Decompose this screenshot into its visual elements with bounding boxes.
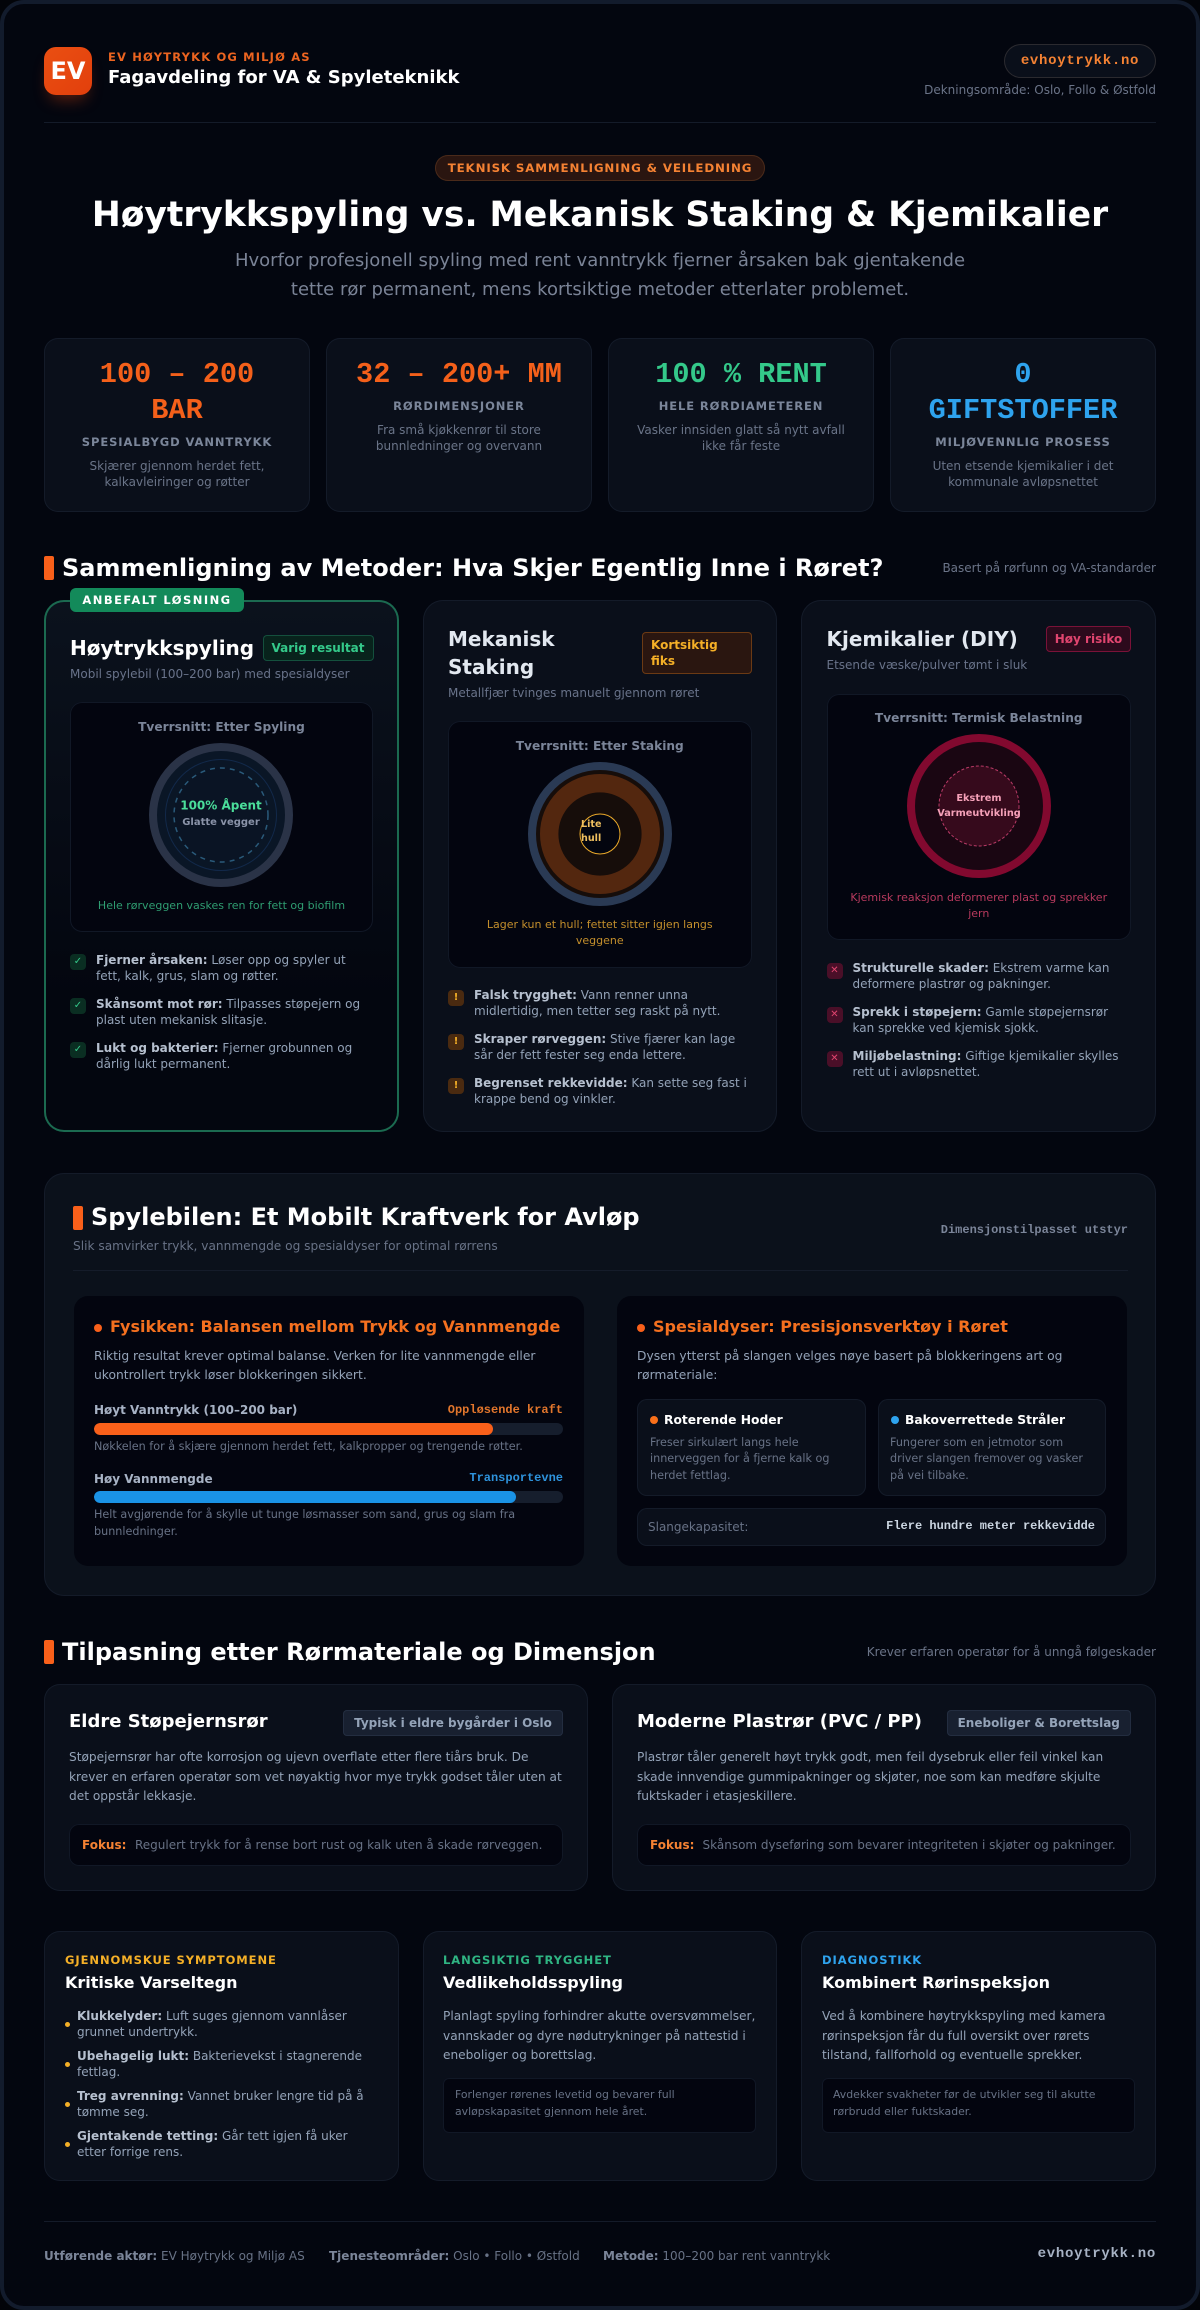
method title: Staking	[448, 655, 534, 679]
diagram panel	[70, 702, 373, 932]
icon: check	[70, 998, 86, 1014]
title: Bakoverrettede Stråler	[905, 1413, 1065, 1427]
benefit 2	[96, 996, 360, 1027]
bar note: volume	[94, 1508, 515, 1538]
title: Roterende Hoder	[664, 1413, 783, 1427]
kicker: GJENNOMSKUE SYMPTOMENE	[65, 1953, 277, 1967]
hazard 3: Miljøbelastning: Giftige kjemikalier skylles	[852, 1048, 1119, 1062]
website: evhoytrykk.no	[1038, 2246, 1156, 2262]
panel: Spylebilen	[44, 1173, 1156, 1596]
intro text	[637, 1348, 1062, 1382]
note box: Avdekker svakheter før de utvikler seg til akutte	[833, 2088, 1095, 2101]
description: herdet fettlag.	[650, 1468, 731, 1482]
diagram caption	[487, 918, 713, 947]
hazard 2	[852, 1004, 1108, 1034]
icon: cross	[826, 962, 842, 978]
stat: 100% rent: 100 % RENT	[655, 358, 827, 390]
benefit 2: Skånsomt mot rør: Tilpasses støpejern og	[96, 997, 360, 1011]
body text: Ved å kombinere høytrykkspyling med kamera	[822, 2009, 1106, 2023]
panel: inspection	[801, 1931, 1156, 2181]
title: Vedlikeholdsspyling	[443, 1973, 623, 1992]
bar note: pressure: Nøkkelen for å skjære gjennom herdet fett, kalkpropper og trengende røtter.	[94, 1440, 523, 1452]
body text: eneboliger og borettslag.	[443, 2048, 596, 2062]
benefit 3: dårlig lukt permanent.	[96, 1057, 230, 1071]
operator note: Krever erfaren operatør for å unngå følgeskader	[867, 1645, 1156, 1659]
hazard 2: Sprekk i støpejern: Gamle støpejernsrør	[852, 1004, 1108, 1018]
subheading: Slik samvirker trykk, vannmengde og spesialdyser for optimal rørrens	[73, 1239, 498, 1253]
icon: check: ✓	[74, 1000, 82, 1011]
method title: Kjemikalier (DIY)	[826, 627, 1018, 651]
sign 1: grunnet undertrykk.	[77, 2025, 198, 2039]
note box: Forlenger rørenes levetid og bevarer full	[455, 2088, 675, 2101]
description: Fungerer som en jetmotor som	[890, 1436, 1063, 1448]
short-term tag	[642, 632, 752, 674]
stat: 32-200 mm	[326, 338, 592, 512]
department name: Fagavdeling for VA & Spyleteknikk	[108, 67, 459, 88]
note box	[822, 2078, 1135, 2133]
sign 2: fettlag.	[77, 2065, 120, 2079]
drawback 2	[474, 1032, 735, 1062]
panel: cast iron	[44, 1684, 588, 1891]
sign 3: tømme seg.	[77, 2105, 149, 2119]
stat: 100-200 bar: kalkavleiringer og røtter	[104, 475, 250, 489]
kicker: DIAGNOSTIKK	[822, 1953, 922, 1967]
stat: 100-200 bar: BAR	[151, 394, 203, 426]
dot	[637, 1324, 645, 1332]
benefit 2: plast uten mekanisk slitasje.	[96, 1013, 267, 1027]
nozzle card: backward jets	[878, 1399, 1106, 1496]
icon: cross: ✕	[830, 1052, 839, 1064]
icon: warning: !	[454, 1080, 458, 1091]
hero	[92, 155, 1108, 235]
diagram caption: veggene	[576, 934, 624, 947]
method title: Høytrykkspyling	[70, 636, 254, 660]
diagram caption	[850, 890, 1108, 920]
coverage area: Dekningsområde: Oslo, Follo & Østfold	[924, 83, 1156, 97]
icon: warning: !	[454, 1036, 458, 1047]
icon: EV logo	[44, 47, 92, 95]
panel: plastic	[612, 1684, 1156, 1891]
website pill	[1004, 44, 1156, 78]
drawback 3: krappe bend og vinkler.	[474, 1092, 616, 1106]
drawback 1	[474, 988, 720, 1018]
stat: 0 giftstoffer: 0	[1014, 358, 1032, 390]
risk tag	[1046, 626, 1131, 652]
description	[650, 1436, 829, 1482]
header	[40, 44, 1156, 108]
body text: Planlagt spyling forhindrer akutte oversvømmelser,	[443, 2009, 755, 2023]
sign 3: Treg avrenning: Vannet bruker lengre tid på å	[77, 2089, 364, 2103]
tag	[946, 1710, 1131, 1736]
body text	[443, 2009, 755, 2062]
recommended badge	[70, 588, 244, 612]
hazard 1: Strukturelle skader: Ekstrem varme kan	[852, 960, 1110, 974]
chart: pipe cross-section, clean: 100% Åpent	[180, 798, 262, 812]
focus note	[69, 1824, 563, 1866]
chart: pipe cross-section, heat damage: Varmeutvikling	[937, 808, 1021, 819]
body text: vannskader og dyre nødutrykninger på nattestid i	[443, 2029, 746, 2043]
intro text: rørmateriale:	[637, 1368, 717, 1382]
body text: Plastrør tåler generelt høyt trykk godt, men feil dysebruk eller feil vinkel kan	[637, 1750, 1103, 1764]
bullet	[65, 2062, 70, 2066]
note box: avløpskapasitet gjennom hele året.	[455, 2105, 647, 2118]
diagram caption: Kjemisk reaksjon deformerer plast og sprekker	[850, 890, 1107, 904]
panel: maintenance	[423, 1931, 777, 2181]
icon: cross: ✕	[830, 964, 839, 976]
panel: Mekanisk Staking	[423, 600, 777, 1132]
list: hazards	[827, 960, 1119, 1078]
kicker: LANGSIKTIG TRYGGHET	[443, 1953, 612, 1967]
dot	[650, 1416, 658, 1424]
panel: Kjemikalier	[801, 600, 1156, 1132]
operator: Utførende aktør: EV Høytrykk og Miljø AS	[44, 2249, 305, 2263]
method: Metode: 100–200 bar rent vanntrykk	[603, 2249, 830, 2263]
icon: cross: ✕	[830, 1008, 839, 1020]
body text: tilstand, fallforhold og eventuelle sprekker.	[822, 2048, 1082, 2062]
bullet	[65, 2102, 70, 2106]
diagram title: Tverrsnitt: Etter Spyling	[138, 720, 305, 734]
method description: Etsende væske/pulver tømt i sluk	[826, 658, 1027, 672]
hazard 3	[852, 1048, 1119, 1078]
benefit 3	[96, 1041, 352, 1071]
nozzle card: rotating	[637, 1399, 866, 1496]
bar tag: pressure: Oppløsende kraft	[448, 1403, 563, 1417]
value: Flere hundre meter rekkevidde	[886, 1519, 1095, 1533]
chart: pipe cross-section, rodded	[528, 762, 672, 906]
icon: check	[70, 1042, 86, 1058]
icon: warning	[448, 1078, 464, 1094]
stat: 0 giftstoffer	[890, 338, 1156, 512]
panel heading: Fysikken: Balansen mellom Trykk og Vannmengde	[110, 1317, 560, 1336]
method description: Mobil spylebil (100–200 bar) med spesialdyser	[70, 667, 350, 681]
panel heading: Spesialdyser: Presisjonsverktøy i Røret	[653, 1317, 1008, 1336]
sign 3	[77, 2088, 364, 2119]
body text: skade innvendige gummipakninger og skjøter, noe som kan medføre skjulte	[637, 1770, 1100, 1784]
stat: 32-200 mm: 32 – 200+ MM	[356, 358, 562, 390]
recommended badge: ANBEFALT LØSNING	[82, 593, 232, 607]
intro text: ukontrollert trykk løser blokkeringen sikkert.	[94, 1368, 367, 1382]
method description: Metallfjær tvinges manuelt gjennom røret	[448, 686, 699, 700]
short-term tag: fiks	[651, 654, 675, 668]
list: drawbacks	[448, 988, 747, 1106]
stat: 100% rent: ikke får feste	[702, 439, 780, 453]
stat: 32-200 mm: bunnledninger og overvann	[376, 439, 542, 453]
diagram caption: jern	[968, 906, 989, 920]
stat: 0 giftstoffer: GIFTSTOFFER	[929, 394, 1117, 426]
sign 2	[77, 2049, 362, 2079]
description: driver slangen fremover og vasker	[890, 1452, 1083, 1465]
drawback 1: midlertidig, men tetter seg raskt på nytt.	[474, 1004, 720, 1018]
panel: physics	[74, 1296, 584, 1566]
note box	[443, 2078, 756, 2133]
bar: volume 90%	[94, 1491, 563, 1503]
label: Slangekapasitet:	[648, 1520, 748, 1534]
bar note: volume: bunnledninger.	[94, 1524, 178, 1538]
body text: det oppstår lekkasje.	[69, 1789, 196, 1803]
eyebrow badge	[435, 155, 765, 181]
focus note: Skånsom dyseføring som bevarer integriteten i skjøter og pakninger.	[702, 1838, 1116, 1852]
focus note: Fokus:	[650, 1838, 694, 1852]
method title	[448, 627, 555, 679]
bar note: volume: Helt avgjørende for å skylle ut tunge løsmasser som sand, grus og slam fra	[94, 1508, 515, 1520]
title: Moderne Plastrør (PVC / PP)	[637, 1711, 922, 1732]
drawback 1: Falsk trygghet: Vann renner unna	[474, 988, 688, 1002]
chart: pipe cross-section, rodded: hull	[581, 833, 601, 844]
drawback 2: sår der fett fester seg enda lettere.	[474, 1048, 686, 1062]
hazard 1	[852, 960, 1110, 990]
method title: Mekanisk	[448, 627, 555, 651]
accent bar	[44, 556, 54, 580]
hazard 2: kan sprekke ved kjemisk sjokk.	[852, 1020, 1039, 1034]
main title: Høytrykkspyling vs. Mekanisk Staking & Kjemikalier	[92, 195, 1108, 235]
focus note: Regulert trykk for å rense bort rust og kalk uten å skade rørveggen.	[135, 1838, 542, 1852]
equipment note: Dimensjonstilpasset utstyr	[941, 1223, 1128, 1237]
chart: pipe cross-section, rodded: Lite	[581, 819, 602, 830]
sign 4	[77, 2128, 348, 2159]
diagram caption: Hele rørveggen vaskes ren for fett og biofilm	[98, 899, 345, 912]
icon: check: ✓	[74, 1044, 82, 1055]
stat: 100% rent	[608, 338, 874, 512]
icon: EV logo: EV	[51, 57, 85, 85]
bullet	[65, 2022, 70, 2026]
sign 2: Ubehagelig lukt: Bakterievekst i stagnerende	[77, 2049, 362, 2063]
intro text	[94, 1349, 536, 1382]
sign 1: Klukkelyder: Luft suges gjennom vannlåser	[77, 2009, 347, 2023]
body text	[69, 1750, 562, 1803]
heading text: Sammenligning av Metoder: Hva Skjer Egentlig Inne i Røret?	[62, 554, 883, 582]
bar label: volume: Høy Vannmengde	[94, 1472, 213, 1486]
hazard 3: rett ut i avløpsnettet.	[852, 1064, 980, 1078]
icon: warning	[448, 1034, 464, 1050]
bar tag: volume: Transportevne	[469, 1471, 563, 1485]
panel: nozzles	[616, 1296, 1126, 1566]
description: innerveggen for å fjerne kalk og	[650, 1452, 829, 1465]
diagram title: Tverrsnitt: Termisk Belastning	[875, 710, 1083, 724]
eyebrow badge: TEKNISK SAMMENLIGNING & VEILEDNING	[448, 161, 752, 175]
bar: pressure 85%	[94, 1423, 563, 1435]
result tag	[262, 635, 374, 661]
focus note	[637, 1824, 1131, 1866]
list: benefits	[70, 952, 360, 1071]
title: Kombinert Rørinspeksjon	[822, 1973, 1050, 1992]
stat: 32-200 mm: RØRDIMENSJONER	[393, 399, 525, 413]
service areas: Tjenesteområder: Oslo • Follo • Østfold	[329, 2249, 580, 2263]
description: Freser sirkulært langs hele	[650, 1436, 799, 1448]
sign 4: Gjentakende tetting: Går tett igjen få uker	[77, 2129, 348, 2143]
icon: cross	[826, 1050, 842, 1066]
body text: fuktskader i etasjeskillere.	[637, 1789, 797, 1803]
focus note: Fokus:	[82, 1838, 126, 1852]
heading text: Tilpasning etter Rørmateriale og Dimensjon	[62, 1638, 656, 1666]
dot	[94, 1324, 102, 1332]
hose capacity row	[637, 1508, 1106, 1546]
footer	[44, 2246, 1156, 2263]
stat: 100-200 bar: 100 – 200	[100, 358, 254, 390]
panel: warning signs	[44, 1931, 398, 2181]
body text: rørinspeksjon får du full oversikt over rørets	[822, 2029, 1090, 2043]
drawback 2: Skraper rørveggen: Stive fjærer kan lage	[474, 1032, 735, 1046]
sign 4: etter forrige rens.	[77, 2145, 183, 2159]
subtitle	[235, 250, 965, 300]
company name: EV HØYTRYKK OG MILJØ AS	[108, 50, 311, 64]
accent bar	[44, 1640, 54, 1664]
description: på vei tilbake.	[890, 1468, 969, 1482]
risk tag: Høy risiko	[1055, 632, 1122, 646]
intro text: Riktig resultat krever optimal balanse. Verken for lite vannmengde eller	[94, 1349, 535, 1363]
drawback 3	[474, 1076, 747, 1106]
icon: check	[70, 954, 86, 970]
bullet	[65, 2142, 70, 2146]
section heading: comparison	[44, 554, 1156, 582]
chart: pipe cross-section, clean	[149, 743, 293, 887]
panel: Høytrykkspyling	[44, 600, 399, 1132]
diagram caption: Lager kun et hull; fettet sitter igjen langs	[487, 918, 713, 931]
diagram title: Tverrsnitt: Etter Staking	[516, 739, 684, 753]
short-term tag: Kortsiktig	[651, 638, 718, 652]
stat: 100-200 bar: SPESIALBYGD VANNTRYKK	[82, 435, 272, 449]
result tag: Varig resultat	[272, 641, 364, 655]
stat: 0 giftstoffer: MILJØVENNLIG PROSESS	[935, 435, 1111, 449]
note box: rørbrudd eller fuktskader.	[833, 2105, 972, 2118]
stat: 0 giftstoffer: kommunale avløpsnettet	[948, 475, 1098, 489]
icon: check: ✓	[74, 956, 82, 967]
subtitle: Hvorfor profesjonell spyling med rent vanntrykk fjerner årsaken bak gjentakende	[235, 250, 965, 271]
website pill: evhoytrykk.no	[1021, 53, 1139, 69]
diagram panel	[826, 694, 1131, 940]
tag	[343, 1710, 563, 1736]
diagram panel	[448, 721, 752, 968]
body text: Støpejernsrør har ofte korrosjon og ujevn overflate etter flere tiårs bruk. De	[69, 1750, 528, 1764]
body text	[822, 2008, 1106, 2062]
icon: cross	[826, 1006, 842, 1022]
benefit 3: Lukt og bakterier: Fjerner grobunnen og	[96, 1041, 352, 1055]
benefit 1	[96, 952, 346, 983]
body text	[637, 1750, 1103, 1803]
stat: 100% rent: HELE RØRDIAMETEREN	[659, 399, 823, 413]
benefit 1: Fjerner årsaken: Løser opp og spyler ut	[96, 953, 346, 967]
chart: pipe cross-section, clean: Glatte vegger	[182, 817, 260, 828]
tag: Eneboliger & Borettslag	[958, 1716, 1120, 1730]
title: Kritiske Varseltegn	[65, 1973, 237, 1992]
title: Eldre Støpejernsrør	[69, 1711, 268, 1732]
stat: 32-200 mm: Fra små kjøkkenrør til store	[377, 423, 541, 437]
drawback 3: Begrenset rekkevidde: Kan sette seg fast i	[474, 1076, 747, 1090]
body text: krever en erfaren operatør som vet nøyaktig hvor mye trykk godset tåler uten at	[69, 1770, 562, 1784]
section heading: adaptation	[44, 1638, 1156, 1666]
stat: 0 giftstoffer: Uten etsende kjemikalier i det	[933, 459, 1113, 473]
description	[890, 1436, 1083, 1482]
icon: warning: !	[454, 992, 458, 1003]
accent bar	[73, 1206, 83, 1230]
benefit 1: fett, kalk, grus, slam og røtter.	[96, 969, 279, 983]
bar label: pressure: Høyt Vanntrykk (100–200 bar)	[94, 1403, 297, 1417]
intro text: Dysen ytterst på slangen velges nøye basert på blokkeringens art og	[637, 1349, 1062, 1363]
stat: 100-200 bar	[44, 338, 310, 512]
dot	[891, 1416, 899, 1424]
tag: Typisk i eldre bygårder i Oslo	[354, 1716, 552, 1730]
chart: pipe cross-section, heat damage	[907, 734, 1051, 878]
chart: pipe cross-section, heat damage: Ekstrem	[956, 793, 1002, 804]
hazard 1: deformere plastrør og pakninger.	[852, 976, 1051, 990]
stat: 100-200 bar: Skjærer gjennom herdet fett,	[90, 459, 264, 473]
icon: warning	[448, 990, 464, 1006]
stat: 100% rent: Vasker innsiden glatt så nytt avfall	[637, 423, 845, 437]
subtitle: tette rør permanent, mens kortsiktige metoder etterlater problemet.	[291, 279, 909, 300]
sign 1	[77, 2008, 347, 2039]
source note: Basert på rørfunn og VA-standarder	[942, 561, 1156, 575]
heading: Spylebilen: Et Mobilt Kraftverk for Avløp	[91, 1203, 640, 1231]
